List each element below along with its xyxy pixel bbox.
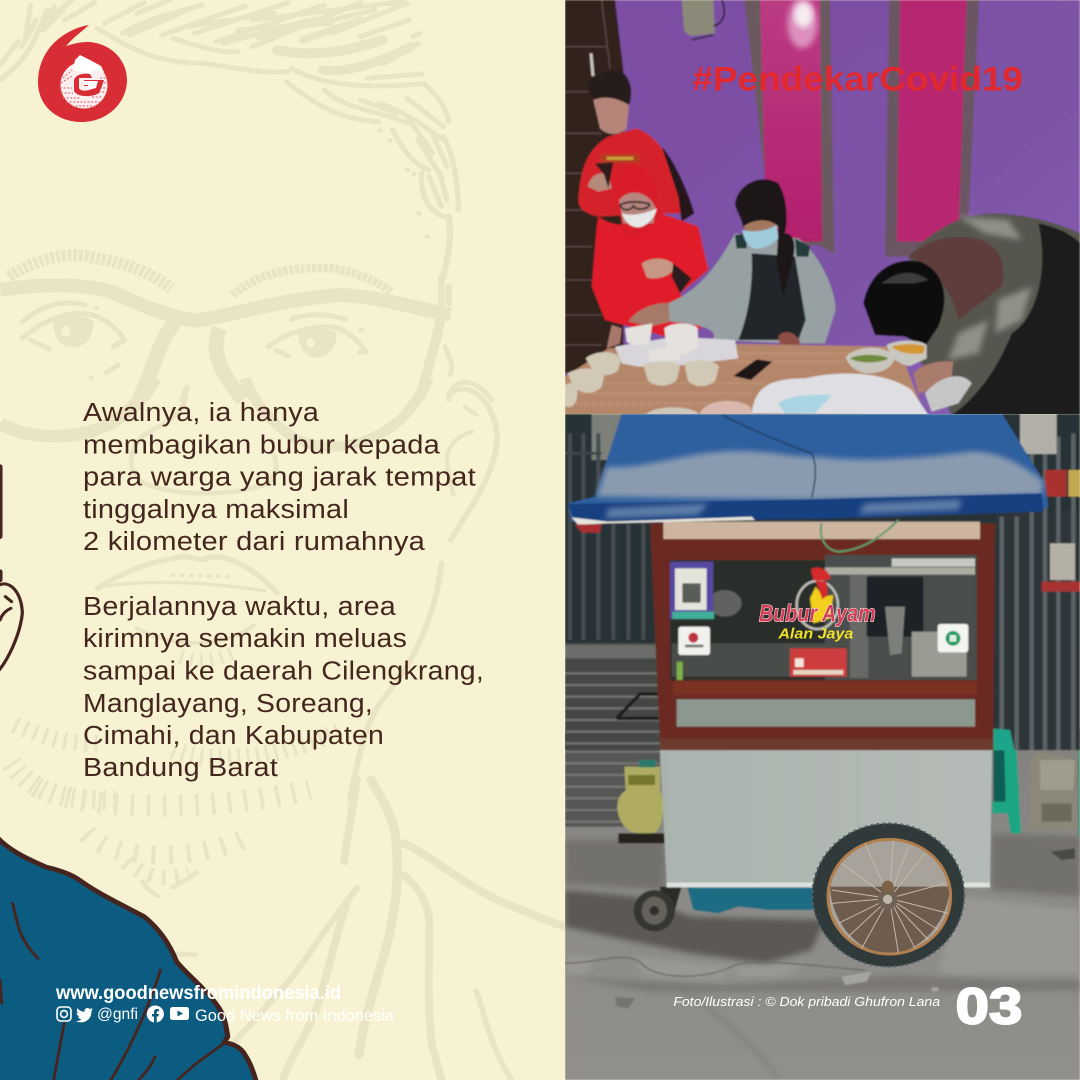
seated woman in grey jacket bbox=[668, 233, 836, 343]
page number: 03 bbox=[956, 977, 1022, 1034]
wall power box bbox=[682, 0, 715, 36]
window one with curtain bbox=[744, 0, 834, 254]
logo red speech ring bbox=[38, 25, 127, 122]
large cart wheel bbox=[812, 823, 964, 967]
social handle: @gnfi bbox=[97, 1006, 138, 1023]
photo: porridge cart bbox=[565, 414, 1080, 1080]
rooster emblem bbox=[797, 567, 838, 629]
standing man in camouflage jacket bbox=[908, 213, 1080, 415]
portrait blue jacket foreground bbox=[0, 837, 257, 1080]
paragraph one: Awalnya, ia hanya bbox=[83, 399, 320, 427]
cart wooden frame bbox=[650, 523, 995, 743]
blue tubs under cart bbox=[687, 885, 818, 913]
logo bbox=[38, 25, 127, 122]
purple wall bbox=[565, 0, 1080, 415]
jacket fold lines bbox=[0, 903, 224, 1080]
portrait left edge with ear bbox=[0, 467, 22, 670]
photo credit: Foto/Ilustrasi : © Dok pribadi Ghufron Lana bbox=[673, 994, 940, 1009]
seated woman in red hijab bbox=[592, 213, 708, 337]
dark door bbox=[565, 0, 623, 373]
paragraph two: sampai ke daerah Cilengkrang, bbox=[83, 658, 484, 686]
eyebrows bbox=[9, 255, 171, 288]
hashtag title: #PendekarCovid19 bbox=[692, 61, 1023, 99]
road surface bbox=[565, 730, 1080, 1080]
website and social footer bbox=[55, 983, 395, 1025]
gas cylinder bbox=[617, 767, 663, 834]
left eye bbox=[22, 303, 124, 373]
person standing in red bbox=[588, 72, 632, 106]
corrugated shutter lower bbox=[565, 730, 660, 827]
caster wheel bbox=[634, 887, 682, 931]
left cream panel bbox=[0, 0, 565, 1080]
green plastic stool bbox=[992, 749, 1022, 834]
paragraph two: kirimnya semakin meluas bbox=[83, 625, 407, 653]
paragraph two: Bandung Barat bbox=[83, 754, 278, 782]
soup bowls with vegetables bbox=[846, 348, 895, 373]
shopeefood sticker bbox=[790, 648, 847, 677]
right eye bbox=[268, 315, 366, 356]
cart metal body bbox=[659, 749, 993, 884]
jacket shape bbox=[0, 837, 257, 1080]
paragraph one bbox=[83, 399, 476, 556]
glasses upper frame bbox=[0, 285, 451, 321]
icon: facebook bbox=[147, 1005, 164, 1022]
table with patterned cloth bbox=[565, 343, 925, 415]
hair strokes bbox=[0, 0, 492, 400]
website url: www.goodnewsfromindonesia.id bbox=[55, 983, 341, 1004]
upper half of cart with canopy bbox=[565, 414, 1080, 750]
paragraph one: 2 kilometer dari rumahnya bbox=[83, 528, 426, 556]
green stool top bbox=[992, 728, 1014, 750]
paragraph one: para warga yang jarak tempat bbox=[83, 464, 476, 492]
lower glasses, nose, mouth, ear and jaw bbox=[0, 378, 497, 800]
paragraph two bbox=[83, 593, 484, 782]
road cracks bbox=[565, 957, 865, 976]
window two with curtain bbox=[885, 0, 979, 257]
street and lower half of cart bbox=[565, 730, 1080, 1080]
facebook page name: Good News from Indonesia bbox=[195, 1006, 395, 1025]
paragraph one: tinggalnya maksimal bbox=[83, 496, 349, 524]
shop subtitle: Alan Jaya bbox=[777, 627, 853, 643]
man's hand with plastic bag bbox=[913, 361, 953, 393]
plastic porridge bowls bbox=[565, 352, 719, 407]
gofood sticker bbox=[678, 627, 710, 655]
icon: instagram bbox=[57, 1007, 71, 1021]
shop name sign: Bubur Ayam bbox=[759, 601, 876, 628]
paragraph one: membagikan bubur kepada bbox=[83, 431, 441, 459]
photo: volunteers portioning porridge bbox=[565, 0, 1080, 415]
fence background bbox=[565, 414, 1080, 750]
red posters on fence bbox=[1042, 470, 1080, 592]
metal tin bbox=[1030, 768, 1076, 829]
logo white eagle emblem bbox=[60, 62, 108, 108]
canopy tarpaulin bbox=[568, 414, 1048, 522]
body text block bbox=[83, 399, 484, 782]
QR code payment sticker bbox=[670, 562, 714, 619]
display window bbox=[670, 560, 977, 680]
green hose bbox=[821, 520, 898, 552]
napkins and white plastic bbox=[615, 337, 738, 367]
beard and neck lines bbox=[36, 780, 565, 1080]
paragraph two: Berjalannya waktu, area bbox=[83, 593, 397, 621]
cart rails and frosted panel bbox=[673, 682, 977, 695]
black phone on table bbox=[733, 359, 772, 380]
corrugated shutter upper bbox=[565, 643, 660, 750]
paragraph two: Cimahi, dan Kabupaten bbox=[83, 722, 384, 750]
watermark portrait line art bbox=[0, 0, 565, 1080]
icon: youtube bbox=[170, 1007, 189, 1020]
paragraph two: Manglayang, Soreang, bbox=[83, 690, 373, 718]
icon: twitter bbox=[76, 1008, 93, 1022]
grabfood sticker bbox=[938, 624, 968, 652]
